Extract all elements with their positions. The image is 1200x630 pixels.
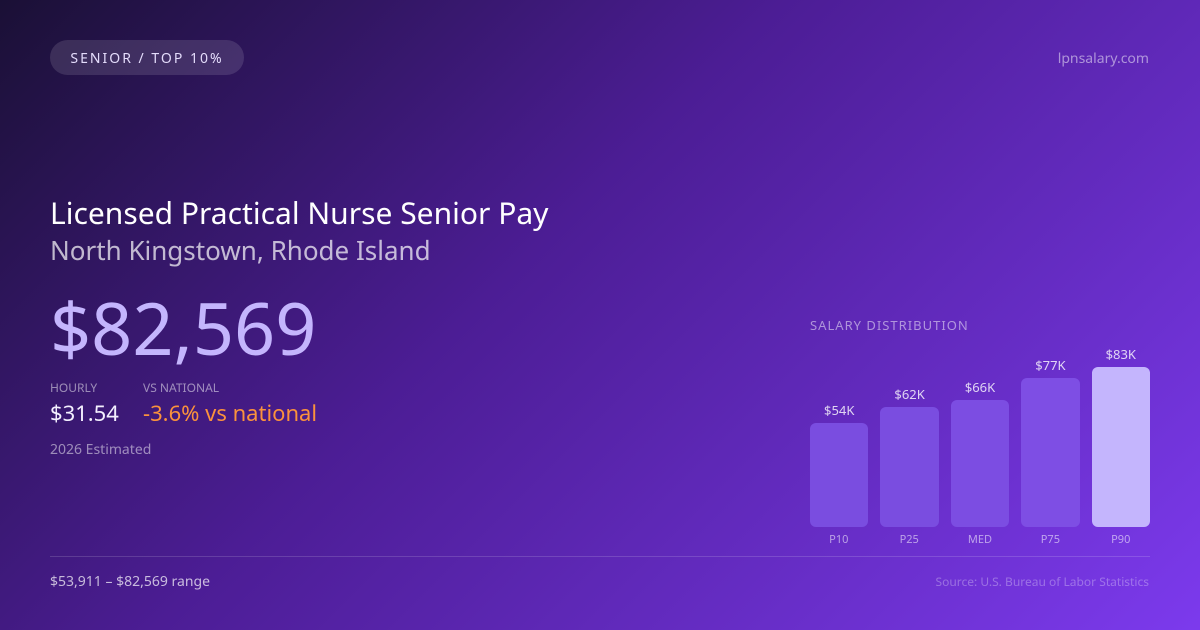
source note: Source: U.S. Bureau of Labor Statistics	[936, 573, 1149, 590]
value label: $83K	[1106, 345, 1136, 363]
bar: P75	[1021, 356, 1080, 547]
chart heading: SALARY DISTRIBUTION	[810, 316, 969, 334]
main salary figure: $82,569	[50, 279, 316, 377]
bar fill	[1021, 378, 1080, 527]
subtitle: location: North Kingstown, Rhode Island	[50, 232, 431, 268]
comparison value: -3.6% vs national	[143, 398, 317, 428]
bar: P90	[1092, 345, 1150, 547]
percentile label: MED	[968, 532, 992, 547]
bar fill	[951, 400, 1009, 527]
bar chart: salary distribution	[810, 345, 1150, 547]
hourly stat	[50, 379, 119, 428]
salary range: $53,911 – $82,569 range	[50, 572, 210, 591]
bar fill	[880, 407, 939, 527]
bar fill	[810, 423, 868, 527]
title: Licensed Practical Nurse Senior Pay	[50, 192, 548, 233]
bar: MED	[951, 378, 1009, 547]
hourly label: HOURLY	[50, 379, 97, 396]
bar fill	[1092, 367, 1150, 527]
percentile label: P75	[1041, 532, 1060, 547]
value label: $54K	[824, 401, 854, 419]
bar: P25	[880, 385, 939, 547]
hourly value: $31.54	[50, 398, 119, 428]
badge: senior / top 10%	[50, 40, 244, 75]
percentile label: P10	[829, 532, 848, 547]
bar: P10	[810, 401, 868, 547]
estimate note: 2026 Estimated	[50, 440, 151, 459]
badge: senior / top 10%: SENIOR / TOP 10%	[70, 49, 224, 68]
value label: $62K	[894, 385, 925, 403]
site name: lpnsalary.com	[1058, 49, 1149, 68]
percentile label: P90	[1111, 532, 1130, 547]
value label: $77K	[1035, 356, 1066, 374]
national comparison stat	[143, 379, 317, 428]
comparison label: VS NATIONAL	[143, 379, 219, 396]
value label: $66K	[965, 378, 995, 396]
percentile label: P25	[900, 532, 919, 547]
